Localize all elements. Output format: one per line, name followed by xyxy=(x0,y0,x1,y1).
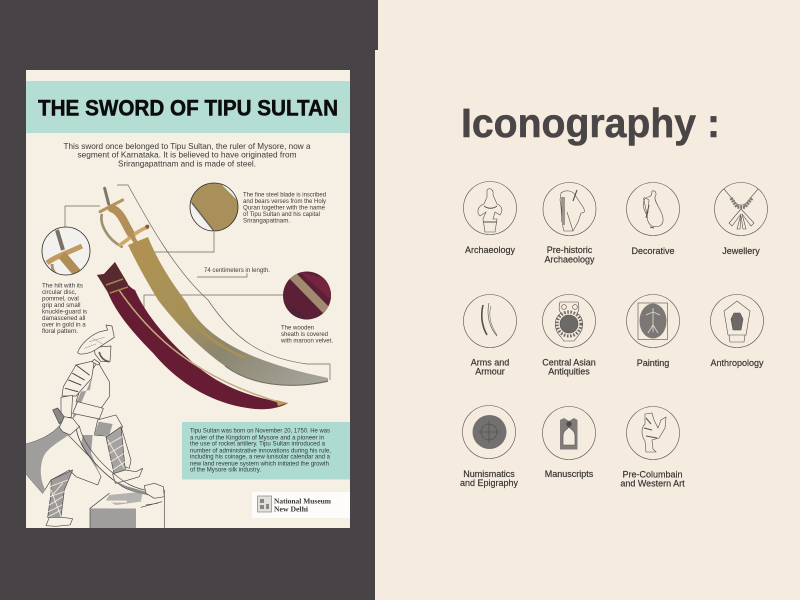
label: Numismatics and Epigraphy: and Epigraphy xyxy=(460,478,519,488)
biography text xyxy=(190,428,331,474)
label: Decorative: Decorative xyxy=(631,246,675,256)
icon: Arms and Armour xyxy=(464,294,516,348)
icon: Numismatics and Epigraphy xyxy=(462,406,516,458)
label: Numismatics and Epigraphy: Numismatics xyxy=(463,469,515,479)
intro text: Srirangapattnam and is made of steel. xyxy=(118,158,256,168)
hilt caption: The hilt with its xyxy=(42,282,83,290)
label: Pre-historic Archaeology: Archaeology xyxy=(544,254,595,264)
circle detail: hilt xyxy=(42,227,90,276)
label: Painting: Painting xyxy=(637,358,669,368)
blade caption: Quran together with the name xyxy=(243,204,326,212)
label: Central Asian Antiquities: Antiquities xyxy=(548,366,590,376)
label: Pre-historic Archaeology xyxy=(544,245,595,264)
cream right background xyxy=(375,0,800,600)
intro text xyxy=(64,141,311,168)
icon: Anthropology xyxy=(710,294,764,348)
hilt caption: floral pattern. xyxy=(42,328,78,335)
icon: Archaeology xyxy=(464,182,516,234)
velvet caption: with maroon velvet. xyxy=(280,338,333,344)
sword blade xyxy=(128,237,328,386)
label: Jewellery: Jewellery xyxy=(722,246,760,256)
icon: Jewellery xyxy=(714,182,768,236)
hilt caption: circular disc, xyxy=(42,289,77,296)
icon: Central Asian Antiquities xyxy=(542,294,596,348)
icon: Painting xyxy=(626,294,680,348)
label: Pre-historic Archaeology: Pre-historic xyxy=(547,245,593,255)
heading: Iconography: Iconography : xyxy=(461,100,720,146)
icon: Pre-Columbain and Western Art xyxy=(626,406,680,460)
biography text: Tipu Sultan was born on November 20, 1750. He was xyxy=(190,428,331,435)
blade caption: Srirangapattnam. xyxy=(243,218,290,224)
connector lines xyxy=(65,185,330,380)
museum logo: National Museum xyxy=(274,498,331,506)
circle detail: velvet xyxy=(283,271,331,320)
intro text: This sword once belonged to Tipu Sultan, the ruler of Mysore, now a xyxy=(64,141,311,151)
title band xyxy=(26,81,350,133)
title: THE SWORD OF TIPU SULTAN xyxy=(38,96,338,120)
label: Arms and Armour: Arms and xyxy=(471,358,509,368)
label: Arms and Armour: Armour xyxy=(475,366,505,376)
label: Pre-Columbain and Western Art: and Western Art xyxy=(620,478,685,488)
hilt caption: over in gold in a xyxy=(42,322,86,329)
hilt caption xyxy=(42,282,87,335)
blade caption: The fine steel blade is inscribed xyxy=(243,191,327,198)
hilt caption: grip and small xyxy=(42,302,81,309)
museum logo: New Delhi xyxy=(274,506,308,514)
label: Numismatics and Epigraphy xyxy=(460,469,519,488)
icon: Pre-historic Archaeology xyxy=(543,182,596,236)
circle detail: blade xyxy=(190,182,238,232)
biography text: number of administrative innovations during his rule, xyxy=(190,447,331,454)
velvet caption xyxy=(281,325,332,342)
velvet caption: The wooden xyxy=(281,324,314,332)
label: Pre-Columbain and Western Art: Pre-Columbain xyxy=(622,470,683,480)
label: Central Asian Antiquities: Central Asian xyxy=(542,358,596,368)
poster panel xyxy=(26,70,350,528)
velvet caption: sheath is covered xyxy=(281,331,328,338)
length caption: 74 centimeters in length. xyxy=(204,267,270,274)
label: Archaeology: Archaeology xyxy=(465,245,516,255)
label: Anthropology: Anthropology xyxy=(710,358,764,368)
label: Pre-Columbain and Western Art xyxy=(620,470,685,488)
biography text: including his coinage, a new lunisolar calendar and a xyxy=(190,454,330,461)
biography box xyxy=(182,422,350,480)
blade caption xyxy=(243,191,327,224)
label: Central Asian Antiquities xyxy=(542,358,596,376)
biography text: new land revenue system which initiated the growth xyxy=(190,460,329,467)
blade caption: of Tipu Sultan and his capital xyxy=(243,211,320,218)
biography text: of the Mysore silk industry. xyxy=(190,467,261,474)
sheath xyxy=(97,262,288,409)
figure of Tipu Sultan xyxy=(26,325,164,528)
icon: Manuscripts xyxy=(542,406,596,460)
hilt caption: knuckle-guard is xyxy=(42,308,87,316)
biography text: a ruler of the Kingdom of Mysore and a pioneer in xyxy=(190,434,324,441)
icon: Decorative xyxy=(626,182,680,236)
label: Arms and Armour xyxy=(471,358,509,376)
dark left background xyxy=(0,0,378,600)
hilt caption: damascened all xyxy=(42,315,85,322)
blade caption: and bears verses from the Holy xyxy=(243,198,327,205)
hilt caption: pommel, oval xyxy=(42,296,79,303)
museum logo xyxy=(252,492,350,518)
intro text: segment of Karnataka. It is believed to have originated from xyxy=(78,150,296,160)
sword hilt xyxy=(100,188,149,255)
label: Manuscripts: Manuscripts xyxy=(545,469,594,479)
biography text: the use of rocket artillery. Tipu Sultan introduced a xyxy=(190,441,325,448)
